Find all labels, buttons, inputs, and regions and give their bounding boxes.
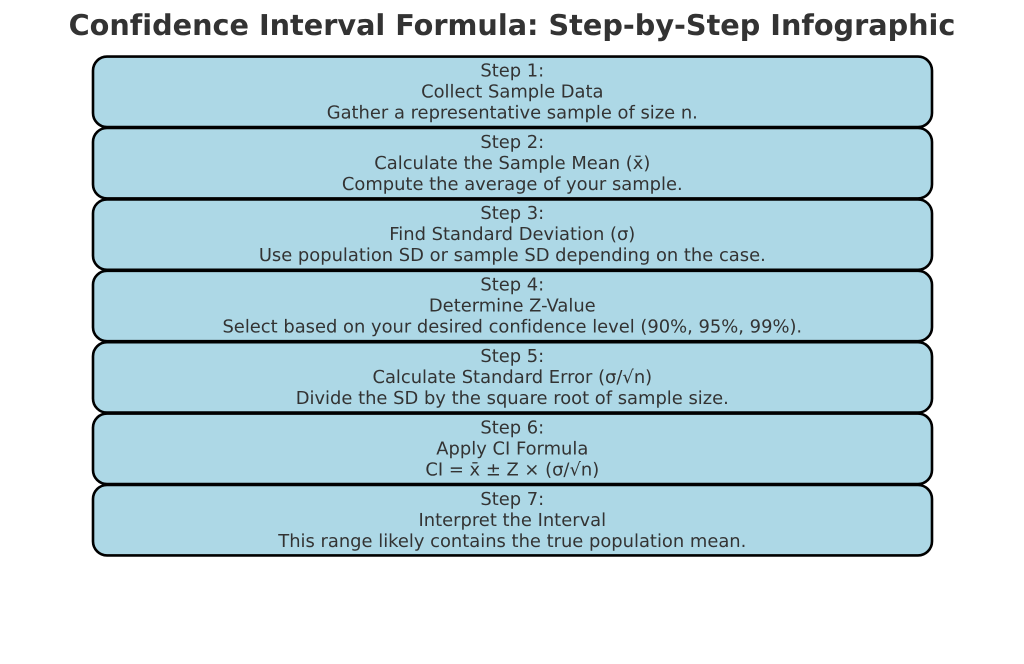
panel: step 6: Step 6:: [480, 417, 544, 438]
panel: step 3: Step 3:: [480, 203, 544, 224]
panel: step 3: [93, 199, 932, 270]
panel: step 2: Compute the average of your sample.: [342, 174, 683, 195]
panel: step 5: [93, 342, 932, 413]
panel: step 4: Determine Z-Value: [429, 296, 596, 317]
panel: step 2: [93, 128, 932, 198]
panel: step 2: Step 2:: [480, 132, 544, 153]
panel: step 3: Use population SD or sample SD depending on the case.: [259, 245, 766, 266]
title: Confidence Interval Formula: Step-by-Step Infographic: [69, 8, 955, 42]
panel: step 2: Calculate the Sample Mean (x̄): [374, 153, 650, 174]
panel: step 1: Collect Sample Data: [421, 81, 604, 102]
panel: step 7: This range likely contains the true population mean.: [277, 531, 746, 552]
panel: step 5: Divide the SD by the square root of sample size.: [296, 388, 729, 409]
panel: step 1: Step 1:: [480, 60, 544, 81]
panel: step 3: Find Standard Deviation (σ): [389, 224, 635, 245]
panel: step 7: Step 7:: [480, 489, 544, 510]
panel: step 4: [93, 271, 932, 341]
panel: step 5: Step 5:: [480, 346, 544, 367]
panel: step 1: Gather a representative sample of size n.: [327, 102, 698, 123]
panel: step 7: [93, 485, 932, 555]
panel: step 5: Calculate Standard Error (σ/√n): [372, 367, 652, 388]
panel: step 7: Interpret the Interval: [419, 510, 606, 531]
panel: step 6: Apply CI Formula: [436, 438, 588, 459]
panel: step 4: Step 4:: [480, 275, 544, 296]
panel: step 6: [93, 414, 932, 484]
panel: step 6: CI = x̄ ± Z × (σ/√n): [425, 459, 599, 480]
panel: step 1: [93, 57, 932, 127]
panel: step 4: Select based on your desired confidence level (90%, 95%, 99%).: [222, 317, 802, 338]
